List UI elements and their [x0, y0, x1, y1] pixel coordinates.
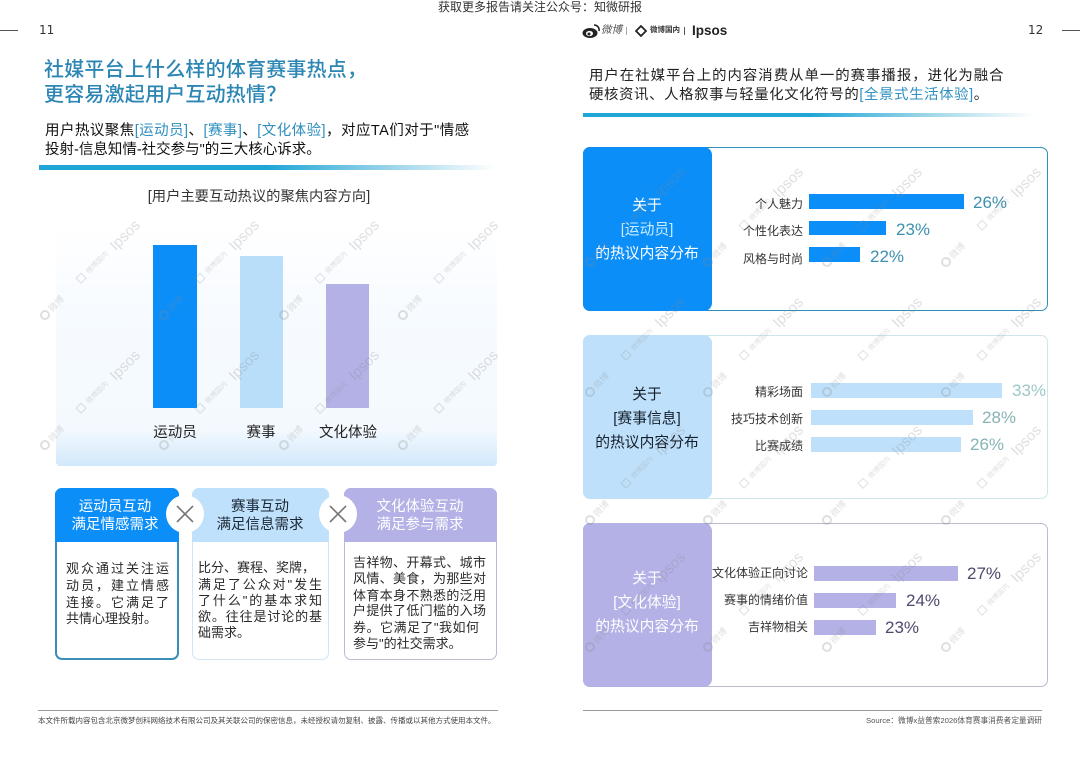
card body text: 欲。往往是讨论的基	[198, 609, 322, 624]
watermark layer: Ipsos	[652, 164, 689, 201]
watermark layer: 微博国内	[747, 581, 773, 607]
watermark layer: 微博	[591, 498, 611, 519]
watermark layer: 微博国内	[442, 249, 468, 275]
left title	[44, 58, 367, 106]
watermark layer: 微博	[709, 240, 729, 261]
watermark layer: Ipsos	[226, 217, 263, 254]
left subtitle: 用户热议聚焦[运动员]、[赛事]、[文化体验]，对应TA们对于"情感	[45, 123, 470, 139]
watermark layer: 微博	[591, 625, 611, 646]
watermark layer: 微博	[709, 370, 729, 391]
right gradient rule	[583, 113, 1035, 117]
panel heading: 的热议内容分布	[595, 246, 699, 262]
bar row: expression: 个性化表达	[743, 224, 803, 238]
watermark layer: Ipsos	[1008, 164, 1045, 201]
watermark layer: 微博	[591, 370, 611, 391]
watermark layer: Ipsos	[652, 549, 689, 586]
watermark layer: 微博国内	[866, 581, 892, 607]
panel: culture	[583, 523, 1048, 687]
bar row: technique: 28%	[982, 408, 1016, 427]
panel heading: [运动员]	[621, 222, 673, 238]
card body text: 动员，建立情感	[66, 578, 169, 593]
left footer: 本文件所载内容包含北京微梦创科网络技术有限公司及其关联公司的保密信息，未经授权请勿复制、披露、传播或以其他方式使用本文件。	[38, 716, 496, 725]
bar row: charm: 个人魅力	[755, 197, 803, 211]
bar row: mascots: 23%	[885, 618, 919, 637]
watermark layer: 微博国内	[84, 379, 110, 405]
left gradient rule	[39, 165, 495, 170]
watermark layer: Ipsos	[770, 549, 807, 586]
panel heading: 的热议内容分布	[595, 434, 699, 450]
card header: 赛事互动	[231, 498, 289, 514]
right title: 硬核资讯、人格叙事与轻量化文化符号的[全景式生活体验]。	[589, 87, 989, 103]
watermark layer: 微博国内	[442, 379, 468, 405]
bar row: emotional value	[724, 591, 940, 610]
watermark layer: Ipsos	[465, 217, 502, 254]
bar chart: focus directions	[56, 225, 497, 466]
watermark layer: 微博国内	[629, 581, 655, 607]
card body text: 础需求。	[198, 625, 250, 640]
card header: 运动员互动	[79, 499, 151, 515]
bar row: results: 26%	[970, 435, 1004, 454]
bar row: results: 比赛成绩	[755, 439, 803, 453]
card body text: 参与"的社交需求。	[353, 636, 462, 651]
bar row: highlights: 精彩场面	[755, 385, 803, 399]
bar row: style	[743, 247, 904, 266]
bar row: charm: 26%	[973, 193, 1007, 212]
watermark layer: 微博	[404, 293, 424, 314]
watermark layer: 微博	[591, 240, 611, 261]
card header	[344, 488, 496, 542]
watermark layer: 微博国内	[747, 326, 773, 352]
top notice: 获取更多报告请关注公众号：知微研报	[438, 0, 642, 14]
card body text: 连接。它满足了	[66, 595, 169, 610]
bar row: style: 风格与时尚	[743, 252, 803, 266]
watermark layer: 微博	[709, 498, 729, 519]
bar row: positive discussion: 文化体验正向讨论	[712, 566, 808, 580]
card header	[192, 488, 328, 542]
bar row: positive discussion: 27%	[967, 564, 1001, 583]
watermark layer: Ipsos	[107, 217, 144, 254]
watermark layer: 微博国内	[985, 581, 1011, 607]
bar row: emotional value: 赛事的情绪价值	[724, 593, 808, 607]
logos: 微博	[601, 24, 622, 36]
watermark layer: 微博	[404, 423, 424, 444]
bar row: technique	[731, 408, 1016, 427]
watermark layer: 微博	[285, 293, 305, 314]
watermark layer: 微博国内	[747, 196, 773, 222]
watermark layer: Ipsos	[1008, 549, 1045, 586]
watermark layer: 微博	[828, 370, 848, 391]
watermark layer: 微博国内	[84, 249, 110, 275]
right footer source: Source：微博x益普索2026体育赛事消费者定量调研	[866, 716, 1042, 725]
icon: cross between cards 1 and 2	[166, 495, 204, 533]
right page number: 12	[1028, 23, 1043, 37]
card body text: 风情、美食，为那些对	[353, 571, 486, 586]
watermark layer: 微博国内	[629, 196, 655, 222]
bar row: emotional value: 24%	[906, 591, 940, 610]
panel heading: 的热议内容分布	[595, 618, 699, 634]
watermark layer: Ipsos	[226, 347, 263, 384]
watermark layer: 微博	[828, 625, 848, 646]
bar row: expression	[743, 220, 930, 239]
watermark layer: Ipsos	[346, 217, 383, 254]
chart title: [用户主要互动热议的聚焦内容方向]	[148, 189, 370, 205]
watermark layer: 微博	[165, 293, 185, 314]
watermark layer: 微博	[828, 498, 848, 519]
left page number: 11	[39, 23, 54, 37]
bar row: technique: 技巧技术创新	[731, 412, 803, 426]
card body text: 观众通过关注运	[66, 561, 169, 576]
card body text: 吉祥物、开幕式、城市	[353, 555, 486, 570]
watermark layer: 微博	[709, 625, 729, 646]
card body text: 比分、赛程、奖牌，	[198, 560, 315, 575]
logos	[582, 23, 727, 38]
watermark layer: 微博国内	[866, 196, 892, 222]
logo: Ipsos: Ipsos	[692, 23, 727, 38]
panel heading	[582, 522, 712, 686]
bar row: style: 22%	[870, 247, 904, 266]
label: events: 赛事	[246, 425, 276, 441]
watermark layer: 微博国内	[323, 379, 349, 405]
watermark layer: Ipsos	[770, 294, 807, 331]
right title	[589, 68, 1005, 103]
panel: athletes	[583, 147, 1048, 311]
left title: 社媒平台上什么样的体育赛事热点，	[44, 59, 367, 81]
watermark layer: Ipsos	[770, 164, 807, 201]
logo: weibo	[582, 24, 600, 38]
bar: culture	[326, 284, 369, 408]
panel heading	[582, 146, 712, 310]
watermark layer: 微博	[46, 423, 66, 444]
watermark layer: 微博	[828, 240, 848, 261]
watermark layer: 微博国内	[323, 249, 349, 275]
panel heading: [赛事信息]	[613, 410, 681, 426]
watermark layer: 微博国内	[629, 454, 655, 480]
watermark layer: 微博国内	[629, 326, 655, 352]
bar row: charm	[755, 193, 1007, 212]
card: athlete interaction	[55, 488, 179, 660]
right footer source	[583, 710, 1042, 727]
left title: 更容易激起用户互动热情？	[44, 84, 286, 106]
watermark layer: Ipsos	[889, 294, 926, 331]
left footer	[38, 710, 498, 727]
right title: 用户在社媒平台上的内容消费从单一的赛事播报，进化为融合	[589, 68, 1005, 84]
watermark layer: 微博	[947, 625, 967, 646]
left subtitle	[45, 122, 470, 158]
watermark layer: 微博	[46, 293, 66, 314]
watermark layer: 微博	[947, 498, 967, 519]
bar: athletes	[153, 245, 197, 408]
card header: 文化体验互动	[376, 498, 464, 514]
card body text	[353, 555, 486, 651]
card body text: 户提供了低门槛的入场	[353, 603, 486, 618]
panel heading: 关于	[632, 570, 662, 586]
card header	[55, 488, 179, 542]
panel heading: [文化体验]	[613, 594, 681, 610]
watermark layer: 微博	[285, 423, 305, 444]
watermark layer: 微博国内	[985, 196, 1011, 222]
card body text: 共情心理投射。	[66, 611, 157, 626]
watermark layer: 微博	[947, 370, 967, 391]
card body text: 券。它满足了"我如何	[353, 620, 479, 635]
watermark layer: 微博国内	[747, 454, 773, 480]
watermark layer: Ipsos	[1008, 422, 1045, 459]
watermark layer: 微博国内	[203, 379, 229, 405]
watermark layer: 微博	[947, 240, 967, 261]
watermark layer: 微博	[165, 423, 185, 444]
logos: 微博国内	[650, 25, 680, 34]
label: culture: 文化体验	[319, 425, 377, 441]
bar row: highlights: 33%	[1012, 381, 1046, 400]
panel heading	[582, 334, 712, 498]
logo: research institute	[635, 25, 647, 37]
bar row: mascots	[748, 618, 919, 637]
card body text	[198, 560, 322, 640]
card: event interaction	[192, 488, 329, 660]
bar row: results	[755, 435, 1004, 454]
watermark layer: 微博国内	[985, 326, 1011, 352]
watermark layer: Ipsos	[652, 422, 689, 459]
bar: events	[240, 256, 283, 408]
watermark layer: Ipsos	[889, 422, 926, 459]
watermark layer: Ipsos	[1008, 294, 1045, 331]
bar row: positive discussion	[712, 564, 1001, 583]
panel: event info	[583, 335, 1048, 499]
left subtitle: 投射-信息知情-社交参与"的三大核心诉求。	[45, 142, 321, 158]
watermark layer: Ipsos	[465, 347, 502, 384]
watermark layer: 微博国内	[866, 454, 892, 480]
card body text	[66, 561, 169, 626]
panel heading: 关于	[632, 386, 662, 402]
card body text: 满足了公众对"发生	[198, 577, 322, 592]
watermark layer: 微博国内	[203, 249, 229, 275]
label: athletes: 运动员	[153, 425, 197, 441]
watermark layer: Ipsos	[107, 347, 144, 384]
card body text: 体育本身不熟悉的泛用	[353, 588, 486, 603]
card header: 满足情感需求	[72, 517, 158, 533]
card: culture interaction	[344, 488, 497, 660]
bar row: expression: 23%	[896, 220, 930, 239]
panel heading: 关于	[632, 198, 662, 214]
watermark layer: 微博国内	[866, 326, 892, 352]
card header: 满足参与需求	[376, 516, 464, 532]
card header: 满足信息需求	[216, 516, 304, 532]
card body text: 了什么"的基本求知	[198, 593, 322, 608]
watermark layer: Ipsos	[652, 294, 689, 331]
bar row: mascots: 吉祥物相关	[748, 620, 808, 634]
watermark layer: Ipsos	[346, 347, 383, 384]
watermark layer: 微博国内	[985, 454, 1011, 480]
bar row: highlights	[755, 381, 1046, 400]
icon: cross between cards 2 and 3	[319, 495, 357, 533]
watermark layer: Ipsos	[889, 164, 926, 201]
watermark layer: Ipsos	[889, 549, 926, 586]
watermark layer: Ipsos	[770, 422, 807, 459]
